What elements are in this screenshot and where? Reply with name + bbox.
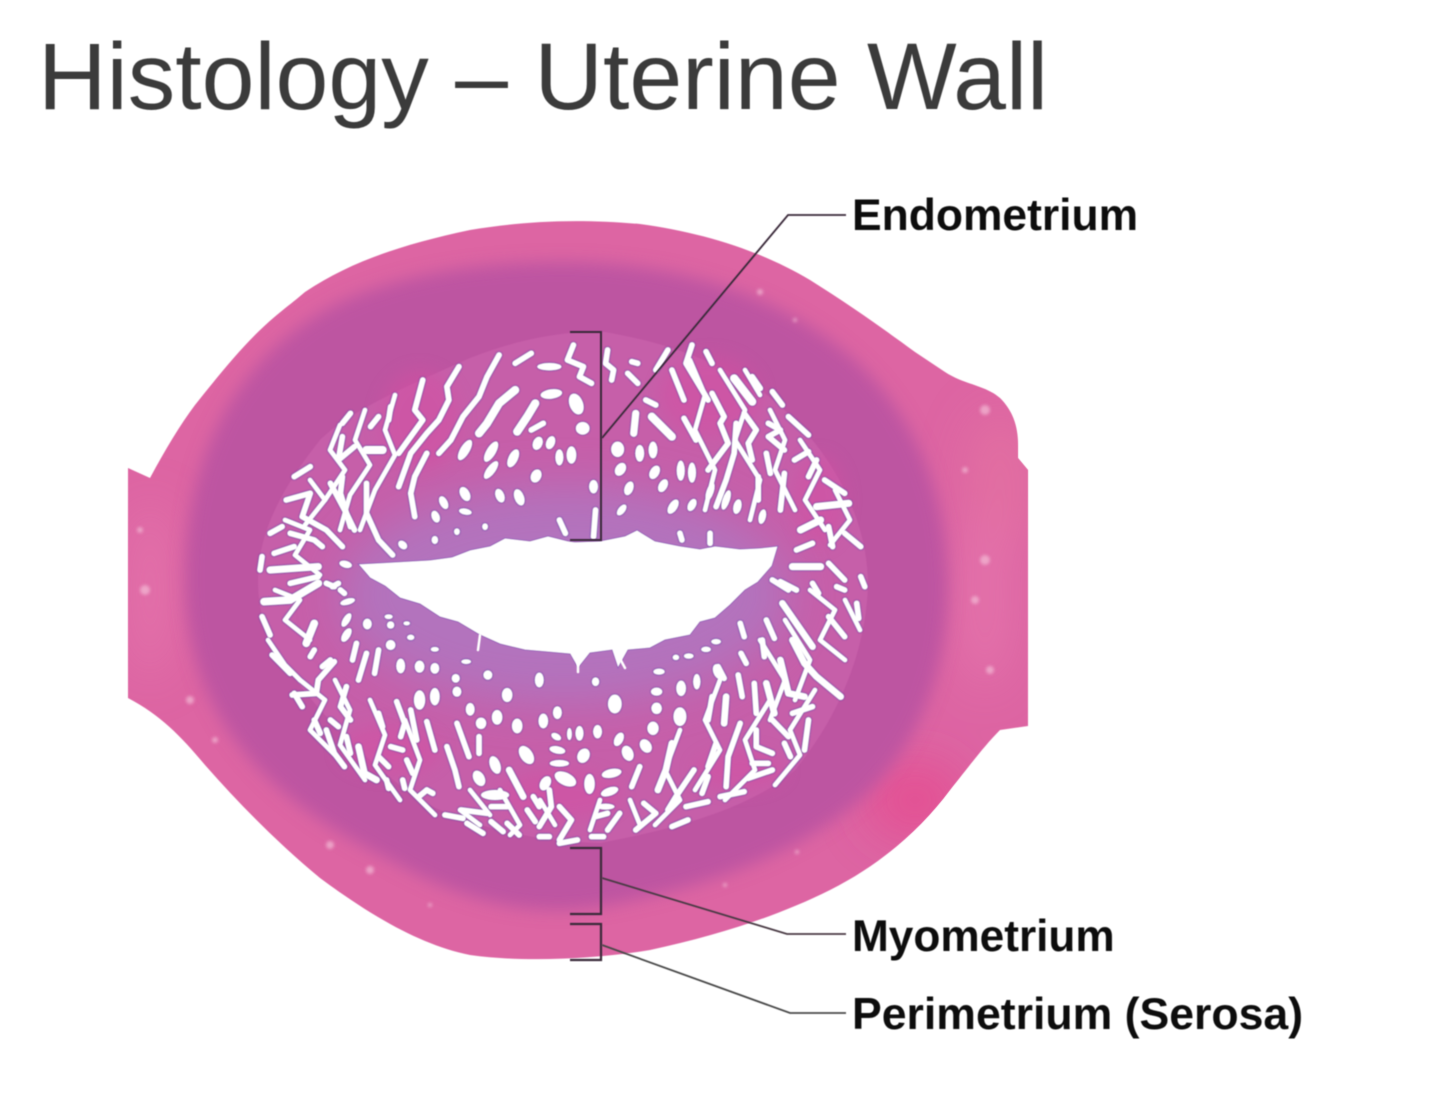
glands, peripheral zigzags [268, 360, 860, 835]
uterine lumen [358, 530, 778, 668]
perimetrium outer layer [128, 221, 1028, 959]
leader line: perimetrium [602, 945, 846, 1013]
label: myometrium: Myometrium [852, 912, 1115, 961]
stained pink stroma streaks [340, 355, 845, 820]
bracket: endometrium [570, 332, 601, 540]
tissue cross-section [126, 221, 1035, 959]
glands, upper half [260, 345, 865, 590]
myometrium ring [185, 262, 948, 910]
endometrium [258, 332, 868, 843]
leader line: myometrium [602, 878, 846, 934]
label: perimetrium: Perimetrium (Serosa) [852, 990, 1303, 1039]
glands, lower half [262, 582, 859, 843]
lumen notches [478, 635, 625, 672]
label: endometrium: Endometrium [852, 191, 1138, 240]
bracket: myometrium [570, 848, 601, 914]
endometrial glands [260, 345, 865, 843]
title: Histology – Uterine Wall [38, 24, 1048, 130]
leader line: endometrium [602, 215, 846, 438]
endometrium basal stroma [340, 485, 790, 705]
bracket: perimetrium [570, 924, 601, 960]
hot pink highlights [126, 410, 1035, 840]
pale specks in outer wall [137, 289, 994, 907]
